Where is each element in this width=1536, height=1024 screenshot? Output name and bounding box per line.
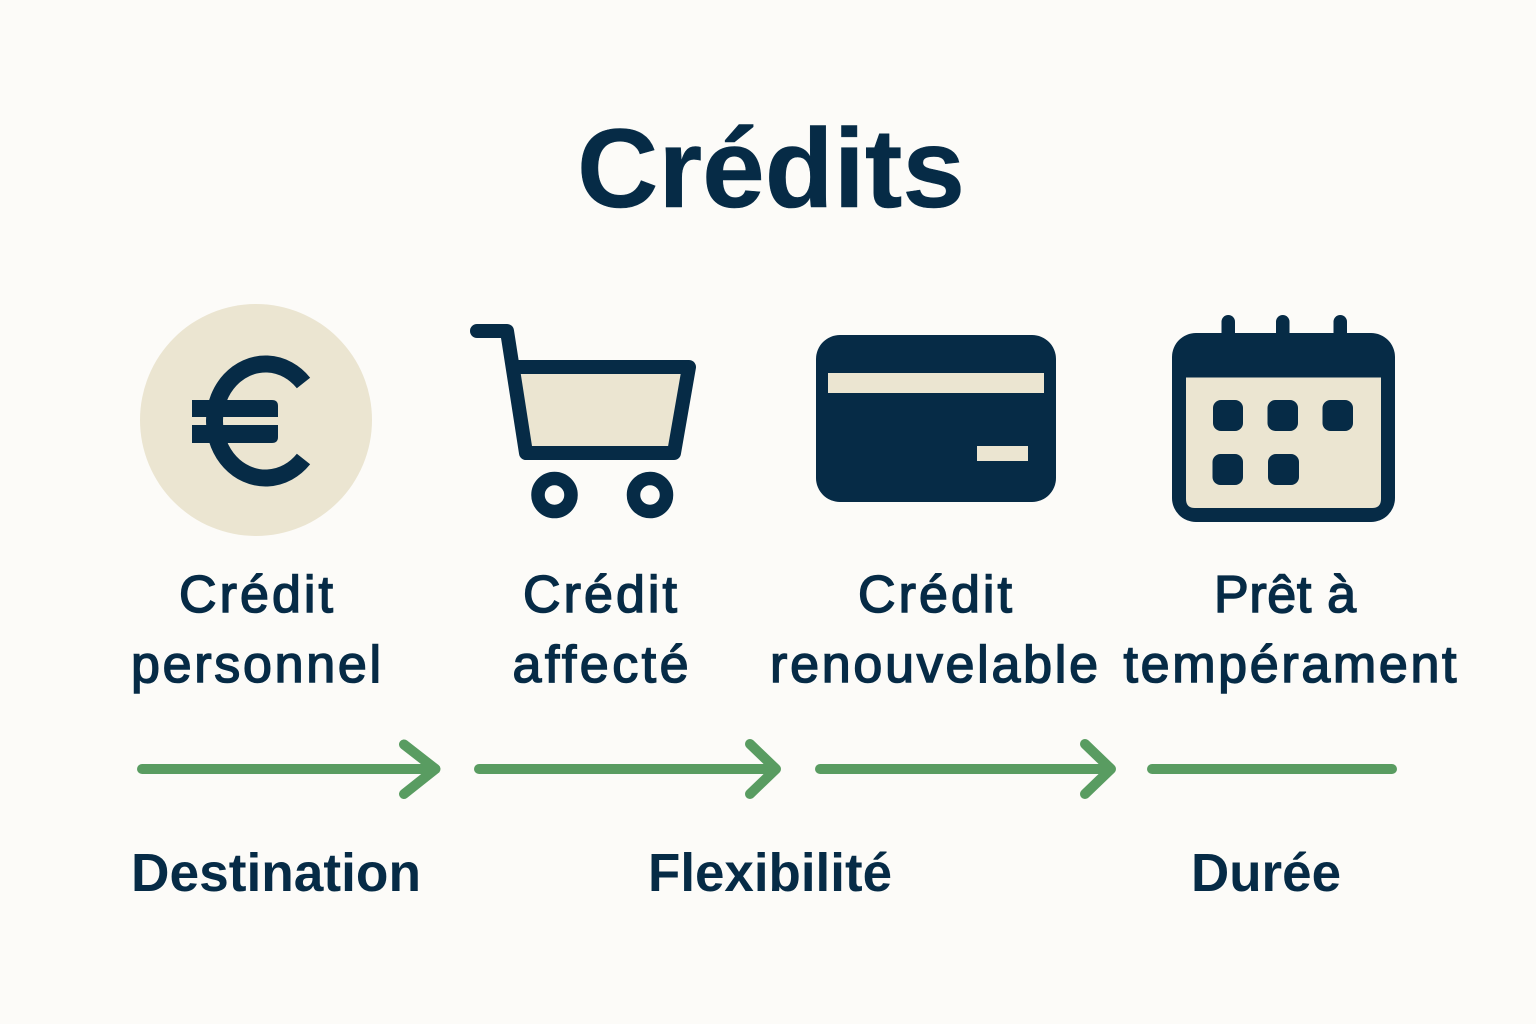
label: Crédit personnel: personnel (131, 636, 381, 694)
label: Crédit affecté: Crédit (523, 566, 678, 624)
axis label: Destination: Destination (131, 843, 421, 903)
arrow: first (142, 744, 436, 794)
title: Crédits (577, 106, 965, 231)
label: Crédit renouvelable: renouvelable (770, 636, 1098, 694)
label: Prêt à tempérament (1124, 566, 1457, 694)
label: Prêt à tempérament: tempérament (1124, 636, 1457, 694)
line: final segment (1152, 764, 1392, 774)
label: Crédit personnel: Crédit (179, 566, 334, 624)
axis label: Flexibilité: Flexibilité (648, 843, 892, 903)
label: Crédit renouvelable (770, 566, 1098, 694)
label: Crédit affecté: affecté (512, 636, 688, 694)
arrow: third (820, 744, 1111, 794)
icon: shopping cart (477, 331, 689, 512)
icon: euro coin (140, 304, 372, 536)
label: Crédit renouvelable: Crédit (858, 566, 1013, 624)
axis label: Durée: Durée (1191, 843, 1341, 903)
label: Crédit affecté (512, 566, 688, 694)
icon: credit card (816, 335, 1056, 502)
arrow: second (479, 744, 776, 794)
label: Crédit personnel (131, 566, 381, 694)
label: Prêt à tempérament: Prêt à (1214, 566, 1356, 624)
icon: calendar (1172, 315, 1395, 522)
